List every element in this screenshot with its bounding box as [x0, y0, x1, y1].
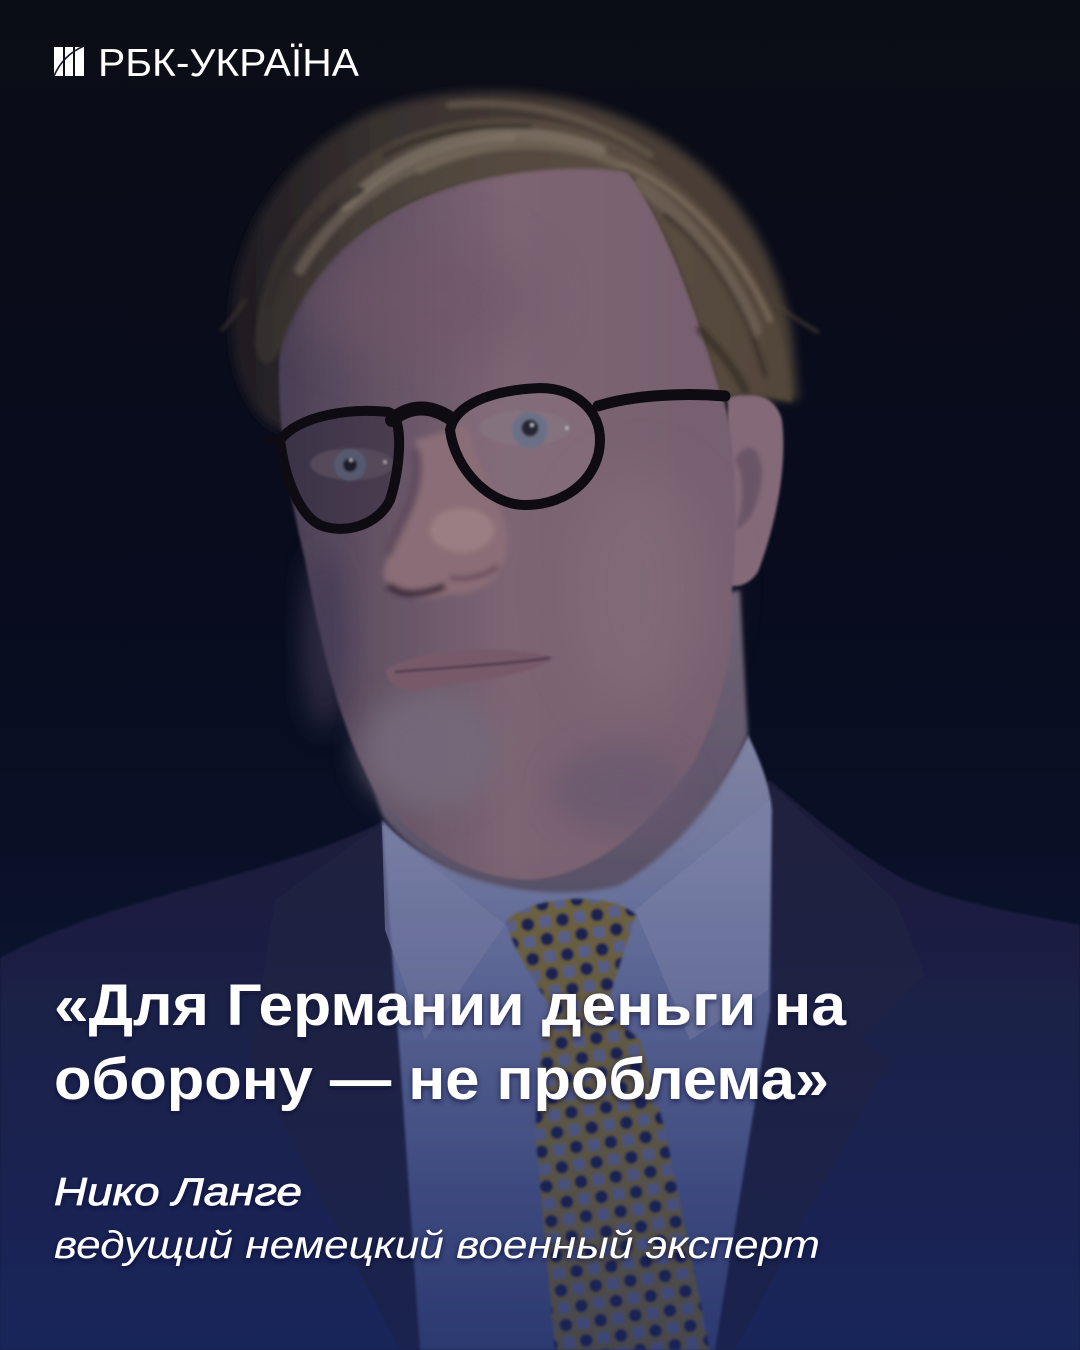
eyes	[310, 411, 571, 481]
suit jacket	[0, 780, 1080, 1350]
face	[279, 165, 736, 880]
headline quote: «Для Германии деньги на	[54, 973, 847, 1038]
ear inner fold	[735, 448, 762, 530]
bottom blue overlay	[0, 850, 1080, 1350]
attribution: ведущий немецкий военный эксперт	[54, 1224, 820, 1267]
logo wordmark: РБК-УКРАЇНА	[98, 42, 359, 85]
hair sweep	[222, 103, 818, 402]
facial shading	[300, 240, 710, 835]
hair back	[231, 92, 798, 430]
logo mark	[54, 46, 84, 76]
jacket lapels	[250, 785, 925, 1350]
shirt	[382, 735, 772, 1350]
tie	[505, 899, 710, 1350]
right ear	[722, 394, 783, 586]
mouth	[385, 649, 555, 690]
headline quote	[54, 973, 847, 1112]
neck	[340, 590, 748, 893]
shirt collar	[382, 800, 770, 1040]
lenses	[280, 388, 600, 529]
logo	[54, 42, 359, 85]
attribution	[54, 1171, 820, 1267]
nose	[383, 425, 508, 598]
attribution: Нико Ланге	[54, 1171, 302, 1214]
headline quote: оборону — не проблема»	[54, 1047, 829, 1112]
glasses	[262, 388, 725, 529]
